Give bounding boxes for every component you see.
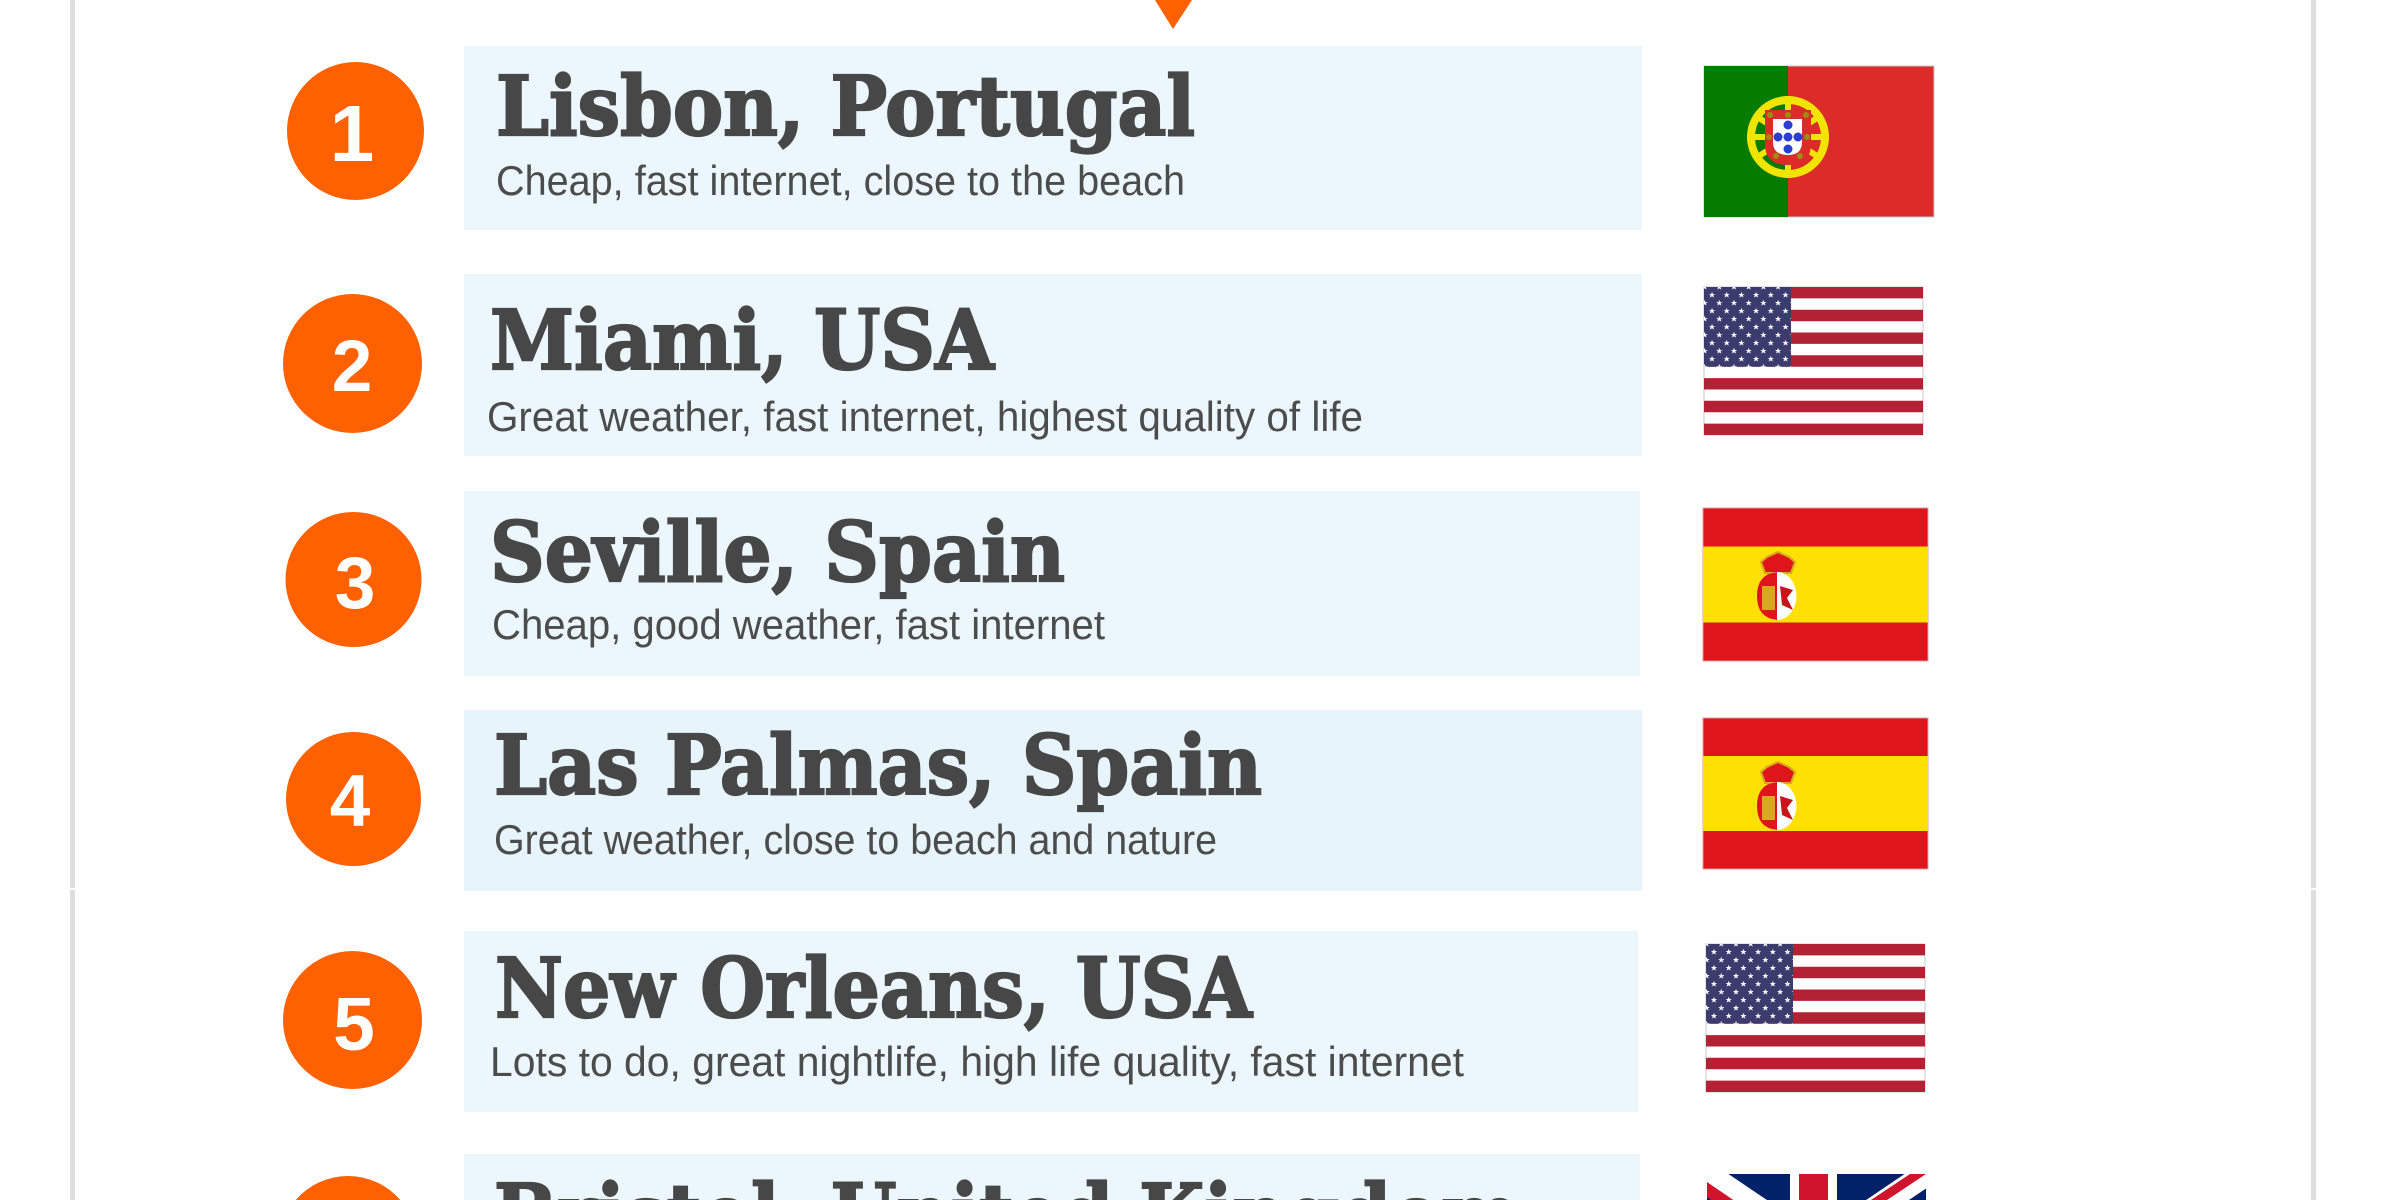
rank 5 badge: 5 bbox=[333, 982, 375, 1066]
rank 5 description: Lots to do, great nightlife, high life quality, fast internet bbox=[490, 1038, 1464, 1085]
rank 2 city heading: Miami, USA bbox=[490, 293, 995, 389]
rank 1 badge: 1 bbox=[330, 89, 374, 178]
rank 3 background bbox=[464, 491, 1640, 676]
rank 6 background bbox=[464, 1154, 1640, 1200]
arrow pointing down to the list bbox=[1155, 0, 1192, 29]
icon: flag of the USA bbox=[1704, 287, 1923, 435]
icon: flag of Portugal bbox=[1704, 66, 1934, 217]
rank 4 badge: 4 bbox=[330, 761, 371, 842]
panel: rank 6 Bristol bbox=[296, 1154, 1926, 1200]
rank 5 city heading: New Orleans, USA bbox=[495, 941, 1253, 1037]
panel: rank 3 Seville bbox=[286, 491, 1928, 676]
rank 2 badge bbox=[283, 294, 422, 433]
rank 1 city heading: Lisbon, Portugal bbox=[496, 59, 1195, 155]
rank 3 badge bbox=[286, 512, 422, 647]
icon: flag of the United Kingdom bbox=[1707, 1174, 1926, 1200]
rank 1 description: Cheap, fast internet, close to the beach bbox=[496, 157, 1185, 204]
rank 2 background bbox=[464, 274, 1642, 456]
rank 2 description: Great weather, fast internet, highest quality of life bbox=[487, 393, 1363, 440]
icon: flag of Spain bbox=[1703, 718, 1928, 869]
icon: flag of Spain bbox=[1703, 508, 1928, 661]
rank 4 badge bbox=[286, 732, 421, 866]
rank 3 description: Cheap, good weather, fast internet bbox=[492, 601, 1105, 648]
rank 3 badge: 3 bbox=[335, 543, 375, 624]
icon: flag of the USA bbox=[1706, 944, 1925, 1092]
rank 4 city heading: Las Palmas, Spain bbox=[494, 718, 1262, 814]
panel: rank 1 Lisbon bbox=[287, 46, 1934, 230]
panel: rank 2 Miami bbox=[283, 274, 1923, 456]
rank 2 badge: 2 bbox=[332, 326, 372, 407]
rank 1 badge bbox=[287, 62, 424, 200]
panel: rank 4 Las Palmas bbox=[286, 710, 1928, 891]
rank 6 badge bbox=[296, 1176, 400, 1200]
rank 4 description: Great weather, close to beach and nature bbox=[494, 816, 1217, 863]
panel: rank 5 New Orleans bbox=[283, 931, 1925, 1112]
rank 4 background bbox=[464, 710, 1642, 891]
rank 3 city heading: Seville, Spain bbox=[490, 505, 1065, 601]
rank 1 background bbox=[464, 46, 1642, 230]
rank 5 badge bbox=[283, 951, 422, 1089]
rank 5 background bbox=[464, 931, 1638, 1112]
